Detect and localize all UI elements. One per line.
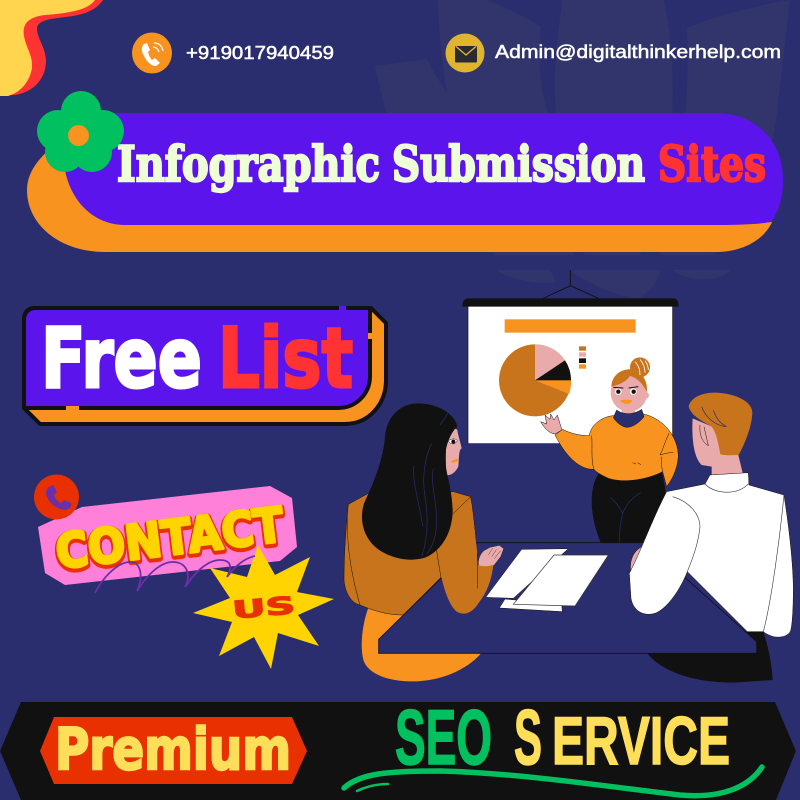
face — [613, 387, 638, 404]
hair — [611, 369, 647, 392]
title text: Infographic — [117, 135, 380, 193]
premium tag — [40, 717, 307, 784]
man hair — [689, 393, 752, 455]
man shirt — [629, 473, 793, 637]
hand — [541, 414, 562, 434]
contact text: CONTACT — [53, 499, 287, 583]
man — [629, 393, 793, 637]
icon: flower — [37, 91, 124, 172]
title banner — [27, 91, 783, 252]
title text: Submission — [392, 135, 645, 193]
icon: phone — [132, 32, 172, 74]
title text — [117, 135, 766, 193]
icon: envelope — [446, 34, 484, 72]
man neck and head — [692, 418, 744, 478]
swoosh — [344, 767, 762, 796]
email address: Admin@digitalthinkerhelp.com — [495, 42, 781, 62]
band background — [0, 702, 796, 800]
banner purple pill — [63, 113, 783, 225]
email contact — [446, 34, 781, 72]
badge purple panel — [24, 308, 370, 408]
starburst — [193, 545, 334, 669]
sweater — [555, 414, 678, 487]
collar — [613, 409, 644, 427]
woman chair — [362, 603, 482, 681]
woman hand — [478, 545, 504, 567]
table — [379, 543, 757, 653]
man hand — [630, 547, 646, 572]
woman — [347, 403, 504, 614]
pink tag — [38, 486, 297, 585]
free list badge — [24, 306, 386, 424]
title text: Sites — [658, 135, 766, 193]
seo text: SEO — [395, 693, 492, 781]
badge text — [41, 310, 353, 407]
woman hair — [362, 403, 457, 560]
decorative corner blob — [0, 0, 103, 96]
bottom band — [0, 693, 796, 800]
woman sleeve — [437, 503, 493, 614]
trousers — [592, 472, 666, 543]
service text: S — [514, 693, 542, 781]
service text — [514, 693, 730, 781]
woman jacket back — [344, 492, 477, 615]
presenter — [541, 357, 678, 543]
chart title bar — [505, 319, 636, 333]
premium text: Premium — [55, 717, 291, 783]
badge text: List — [218, 310, 353, 407]
phone number: +919017940459 — [186, 43, 334, 63]
phone contact — [132, 32, 334, 74]
chart legend — [579, 346, 586, 369]
badge outline gaps — [66, 306, 372, 410]
meeting illustration — [344, 270, 793, 683]
badge backing — [24, 308, 386, 424]
us text: US — [231, 591, 296, 625]
service text: ERVICE — [552, 703, 730, 779]
neck — [622, 407, 635, 417]
woman face — [446, 429, 462, 475]
projector screen — [462, 270, 679, 444]
contact us sticker — [34, 474, 334, 669]
head — [611, 374, 647, 412]
squiggle — [95, 556, 255, 593]
man trousers — [647, 632, 773, 683]
banner orange backing — [27, 140, 772, 252]
papers — [486, 549, 608, 612]
icon: phone badge — [34, 474, 79, 520]
contact text: CONTACT — [53, 497, 287, 581]
pie chart — [499, 344, 571, 416]
badge text: Free — [41, 310, 202, 407]
